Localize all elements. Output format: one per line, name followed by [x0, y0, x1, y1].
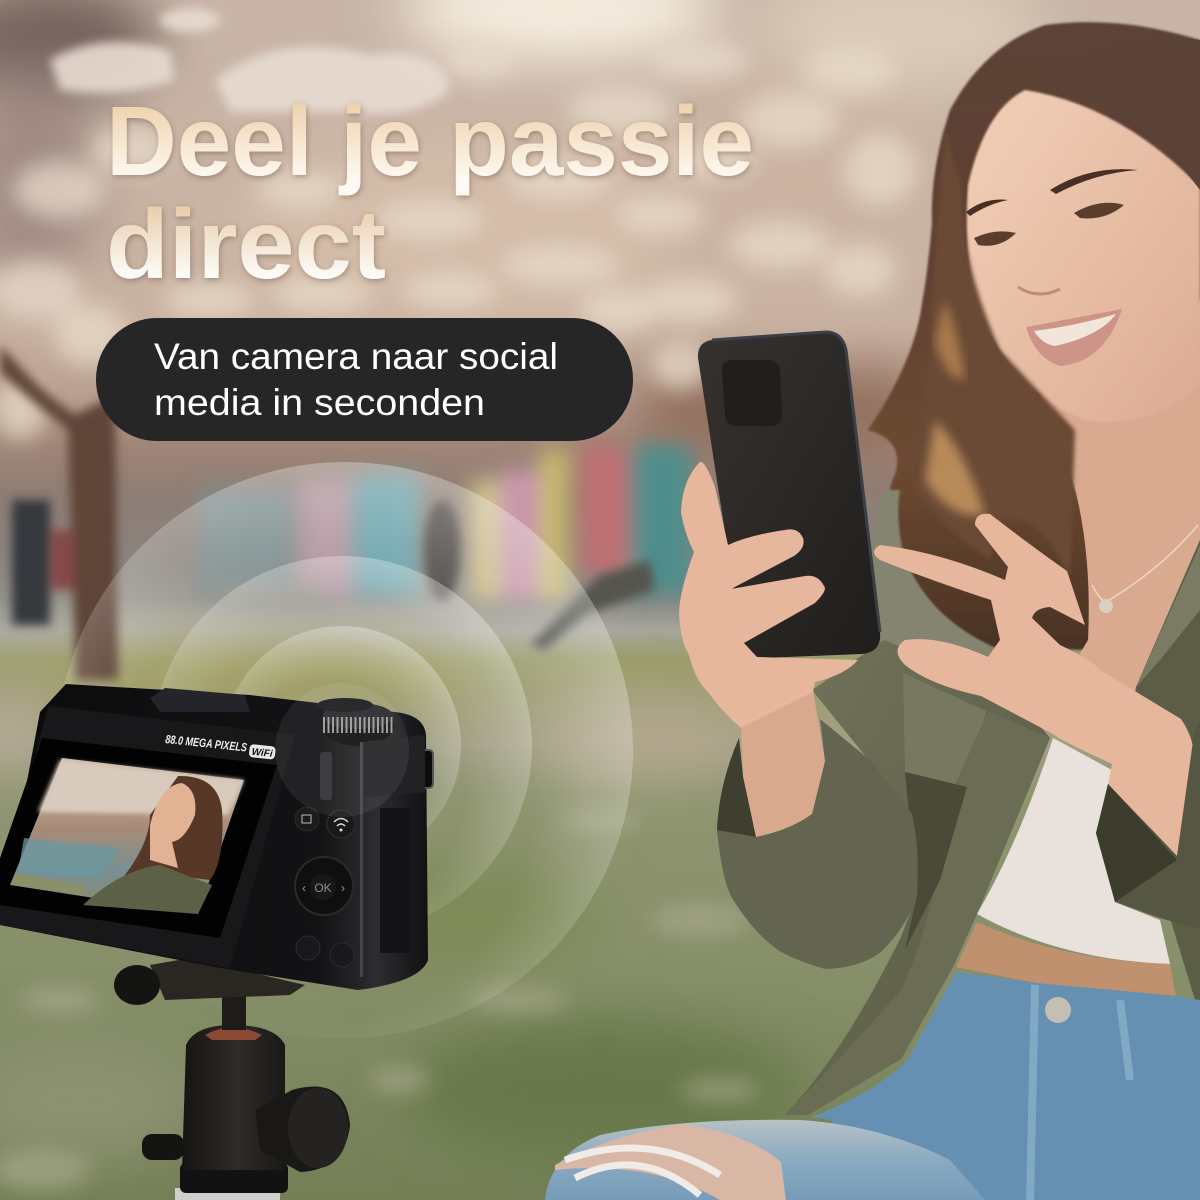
neck and chest — [1040, 350, 1200, 760]
left forearm — [741, 690, 825, 837]
right cuff — [1096, 722, 1200, 929]
title: direct — [106, 189, 386, 299]
left sleeve — [717, 719, 918, 969]
hair back — [868, 22, 1200, 650]
right hand — [874, 514, 1194, 856]
white top — [977, 738, 1170, 964]
navigation pad: › — [341, 881, 345, 895]
blurred graffiti wall — [200, 445, 692, 607]
subtitle pill: Van camera naar social — [154, 336, 558, 377]
camera on tripod — [0, 684, 433, 1200]
navigation pad: OK — [314, 881, 332, 895]
jeans — [812, 972, 1200, 1200]
mode dial — [317, 698, 394, 746]
subtitle pill: media in seconden — [154, 382, 485, 423]
navigation pad: ‹ — [302, 881, 306, 895]
navigation pad — [295, 857, 353, 915]
blossom clusters — [0, 40, 916, 440]
hair top — [1040, 37, 1200, 190]
title — [106, 86, 754, 299]
necklace — [1092, 525, 1198, 602]
face — [967, 90, 1200, 422]
ripped denim — [555, 1124, 786, 1200]
camera body — [0, 684, 428, 990]
woman holding phone — [545, 22, 1200, 1200]
left hand — [679, 462, 858, 728]
wifi and playback buttons — [295, 807, 355, 838]
subtitle pill — [96, 318, 633, 441]
grass flecks — [0, 810, 760, 1190]
jeans button — [1045, 997, 1071, 1023]
hair front strands — [905, 130, 1075, 580]
screen photo — [10, 758, 244, 914]
tripod — [114, 958, 350, 1200]
signal rings behind camera — [57, 462, 633, 1038]
wifi badge: WiFi — [251, 747, 273, 760]
bright blossom highlights — [50, 8, 450, 114]
inner signal ring over camera — [275, 683, 409, 817]
right jacket panel — [1125, 540, 1200, 1010]
jacket shoulder — [870, 490, 1000, 720]
phone — [698, 332, 880, 658]
phone camera module — [722, 360, 782, 426]
title: Deel je passie — [106, 86, 754, 196]
wifi badge — [249, 744, 276, 760]
jacket body — [784, 640, 1050, 1115]
midriff — [956, 922, 1176, 996]
tilted screen panel — [0, 706, 295, 968]
eyebrows, eyes, nose and smile — [966, 169, 1138, 366]
lower buttons — [296, 936, 354, 967]
spec label: 88.0 MEGA PIXELS — [165, 732, 248, 755]
chest pocket flap — [903, 673, 986, 787]
hot shoe — [150, 688, 250, 712]
wrist strap lug — [416, 750, 433, 788]
jacket front placket — [784, 711, 1050, 1115]
thigh — [545, 1120, 985, 1200]
